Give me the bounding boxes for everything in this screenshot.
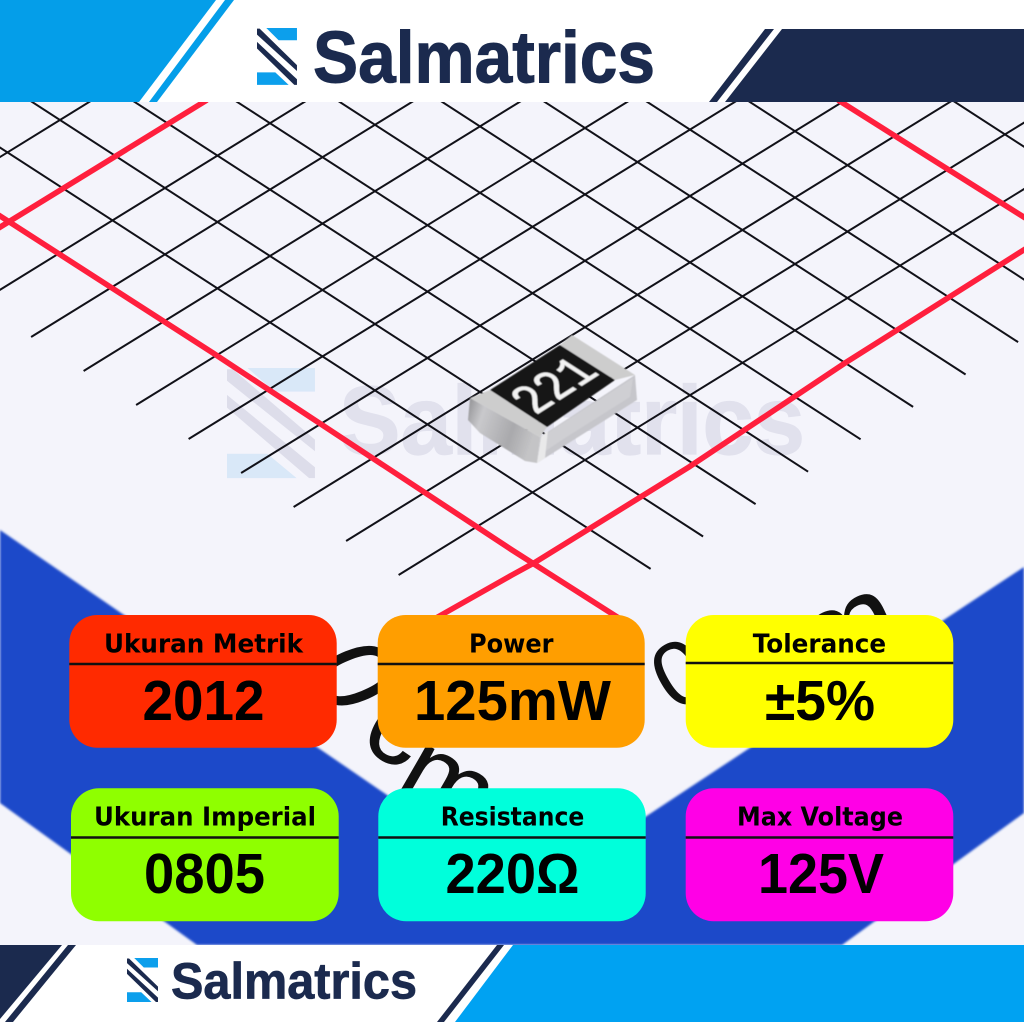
spec card: Power: [378, 615, 645, 748]
printed scale characters: m: [379, 705, 520, 858]
label: Ukuran Imperial: [94, 802, 316, 832]
value: ±5%: [765, 669, 875, 733]
value: 125V: [758, 842, 884, 906]
footer navy stripe left: [5, 945, 76, 1022]
label: Ukuran Metrik: [104, 630, 304, 660]
header blue stripe: [149, 0, 234, 102]
spec card: Resistance: [378, 788, 646, 921]
watermark icon: [227, 368, 315, 478]
printed scale characters: 0: [633, 617, 729, 731]
spec card: Tolerance: [686, 615, 953, 748]
header blue block: [0, 0, 216, 102]
red major grid lines: [0, 100, 1024, 622]
label: Power: [469, 630, 554, 660]
resistor black marking face: [490, 345, 615, 427]
resistor marking 221: 221: [498, 350, 614, 424]
watermark logo: [227, 366, 805, 478]
label: Max Voltage: [737, 802, 903, 832]
resistor top cap right: [560, 335, 635, 380]
printed scale characters: m: [768, 544, 922, 714]
header logo icon: [257, 28, 297, 85]
SMD resistor: [468, 335, 637, 463]
spec card: Ukuran Metrik: [69, 615, 337, 748]
label: Tolerance: [753, 630, 886, 660]
black grid lines: [0, 102, 1024, 576]
top header bar: [0, 0, 1024, 102]
header navy block: [725, 29, 1024, 102]
blue printed band: [0, 530, 1024, 945]
bottom footer bar: [0, 945, 1024, 1024]
printed scale characters: [336, 594, 886, 789]
label: Resistance: [441, 802, 584, 832]
printed scale characters: c: [345, 660, 454, 794]
footer wordmark: Salmatrics: [171, 952, 417, 1010]
header navy stripe: [709, 29, 774, 102]
printed scale characters: 0: [286, 625, 423, 727]
value: 125mW: [414, 669, 611, 733]
value: 0805: [144, 842, 265, 906]
spec card: Ukuran Imperial: [71, 788, 339, 921]
footer blue block: [455, 945, 1024, 1022]
footer navy block: [0, 945, 62, 1019]
spec card: Max Voltage: [686, 788, 953, 921]
header wordmark: Salmatrics: [313, 18, 655, 98]
value: 2012: [142, 669, 264, 733]
watermark wordmark: Salmatrics: [339, 366, 805, 475]
resistor end face: [468, 398, 540, 463]
footer logo icon: [127, 958, 158, 1002]
footer navy stripe right: [437, 945, 504, 1022]
resistor long side: [537, 375, 637, 463]
resistor top cap left: [470, 390, 547, 437]
value: 220Ω: [446, 842, 580, 906]
